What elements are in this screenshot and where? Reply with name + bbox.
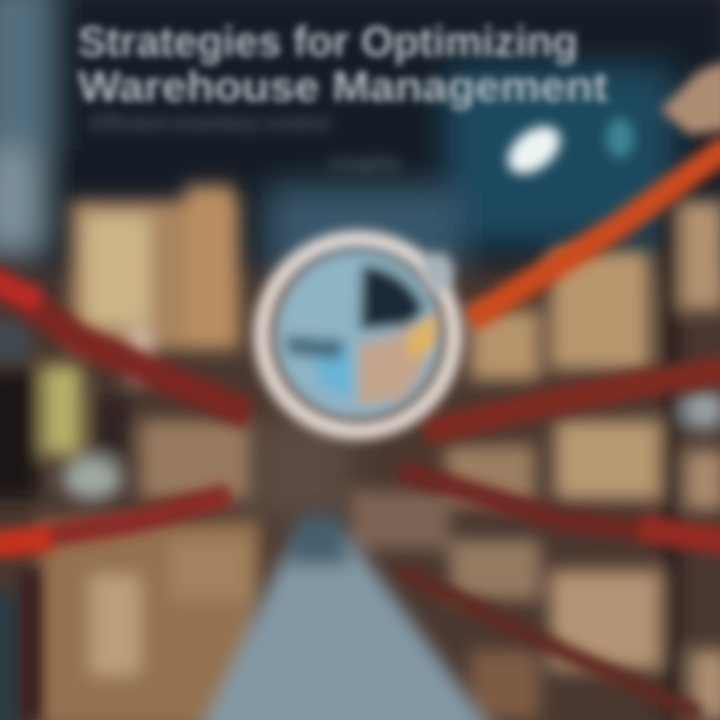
right shelving xyxy=(350,200,720,720)
subtitle: Efficient inventory control xyxy=(90,113,330,135)
left red beams xyxy=(0,275,250,720)
chart slices xyxy=(274,251,442,419)
subtitle: Insights xyxy=(330,153,400,175)
title xyxy=(78,18,608,111)
background: dark warehouse ceiling xyxy=(0,0,720,520)
aisle floor xyxy=(195,515,500,720)
subtitle xyxy=(90,113,400,175)
circular pie chart xyxy=(262,239,454,431)
title: Strategies for Optimizing xyxy=(78,18,578,66)
right red beams xyxy=(400,145,720,715)
title: Warehouse Management xyxy=(78,63,608,111)
left shelving xyxy=(0,185,260,720)
ceiling light xyxy=(499,60,720,183)
chart ring xyxy=(262,239,454,431)
ring tab xyxy=(422,252,454,292)
